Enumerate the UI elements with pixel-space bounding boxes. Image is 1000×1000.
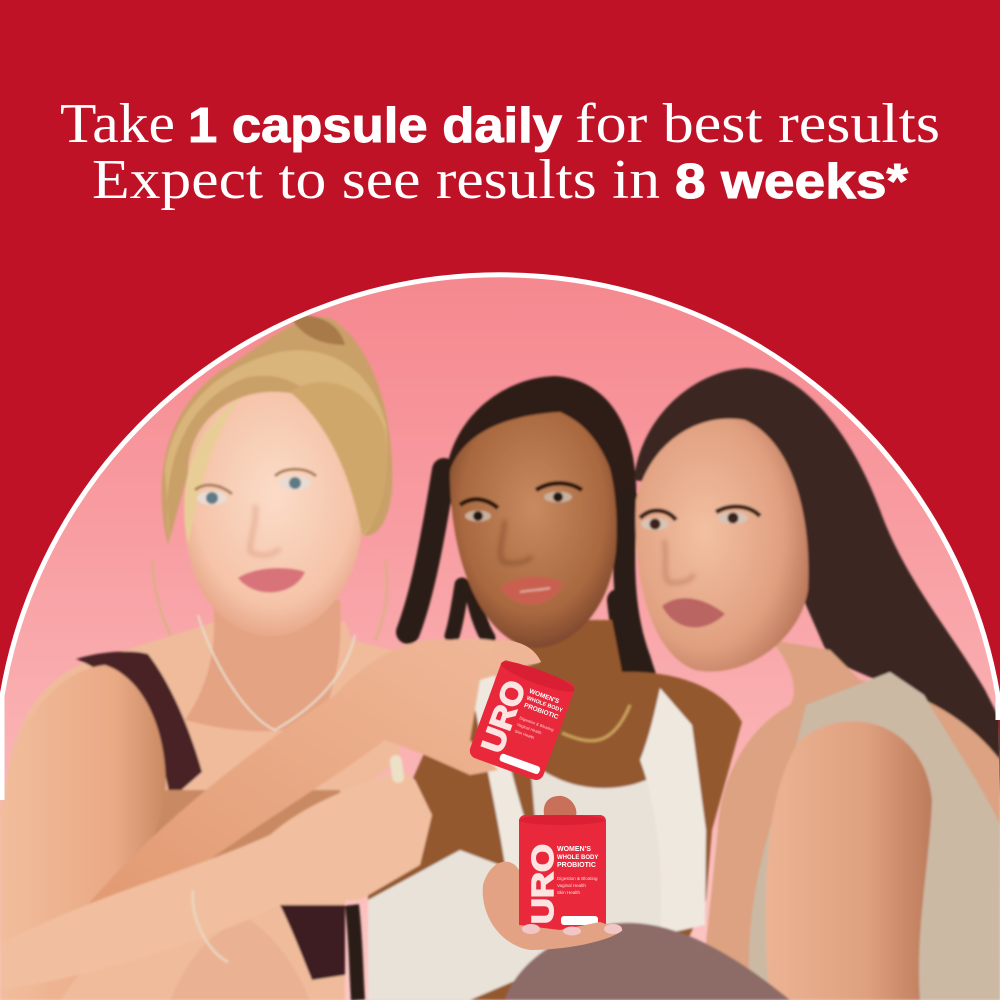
bracelet [193,890,228,962]
people photo [0,315,1000,1000]
fingernails [522,924,622,936]
bottle bottom: PROBIOTIC [557,862,596,869]
bottle bottom: WHOLE BODY [557,855,598,861]
forearm and hand holding capsule [0,770,432,990]
thumb of hand holding bottom bottle [544,796,576,816]
bottle top: PROBIOTIC [523,702,560,721]
braid in front [352,905,358,1000]
title: 1 capsule daily [188,99,562,153]
woman right: hair, body, arm [634,368,1000,1000]
bottle top: Digestion & Bloating [519,715,554,732]
bottle bottom: Skin Health [557,890,581,895]
bottle top: WOMEN'S [528,688,561,706]
forearm and hand reaching for bottle [90,636,541,904]
bottle bottom: Digestion & Bloating [557,876,598,881]
bottle bottom: URO [525,844,560,924]
thigh [170,920,310,1000]
bottle bottom: Vaginal Health [557,883,586,888]
arch outline [2,275,998,800]
title: Take [60,93,175,155]
title: for best results [575,93,940,155]
title: Expect to see results in [92,149,660,211]
legs foreground [505,923,790,1000]
woman center: braids and body [368,376,742,1000]
bottle top: WHOLE BODY [526,695,564,714]
capsule [389,754,405,784]
woman left: hair, head, torso [5,315,400,1000]
bottle bottom: WOMEN'S [557,846,591,853]
fingertips over top bottle [499,640,541,664]
title: 8 weeks* [675,155,909,209]
title [60,93,940,211]
photo arch [0,275,1000,1000]
bottle top: Skin Health [514,728,535,740]
left woman arm down [0,665,166,1000]
pink backdrop [0,275,1000,1000]
hand holding bottom bottle [483,862,623,950]
bottle top [468,657,577,782]
bottle bottom [519,815,606,930]
bottle top: URO [474,676,533,757]
bottle top: Vaginal Health [516,722,542,735]
